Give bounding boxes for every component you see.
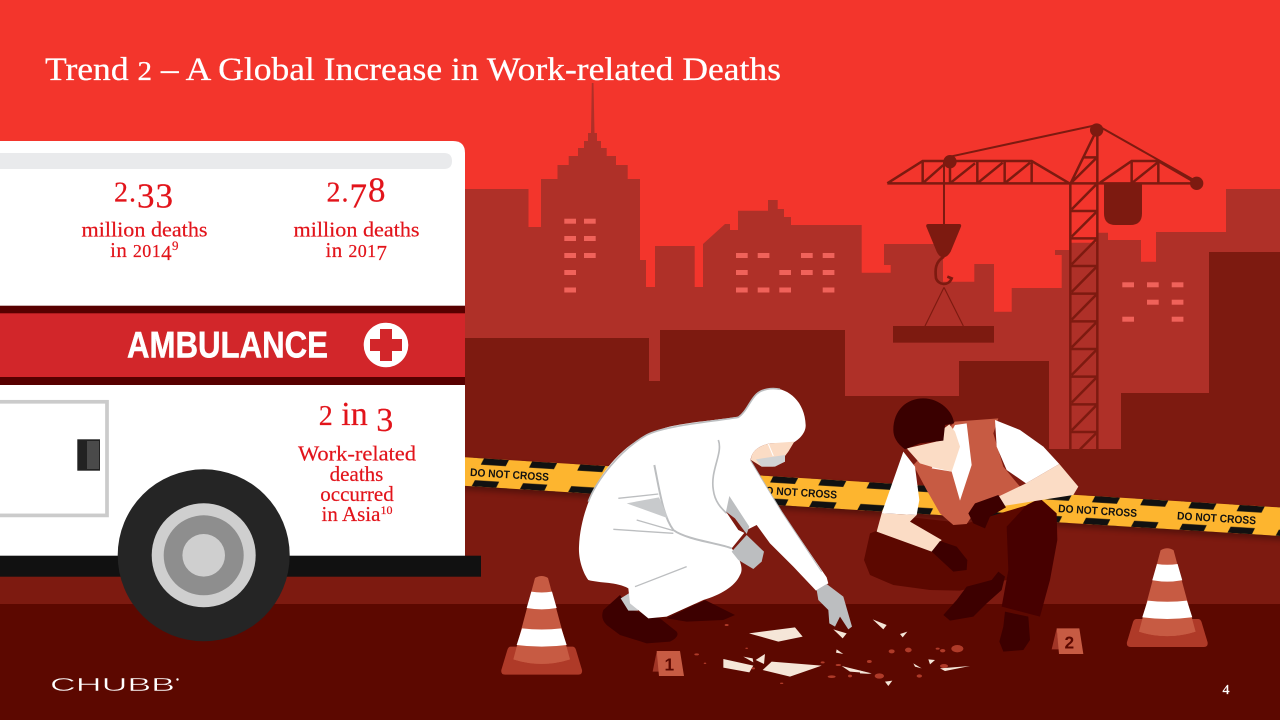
stat: 2 in 3 work-related deaths in Asia: 10 — [380, 503, 392, 517]
building windows — [564, 219, 1183, 322]
head and arms skin — [877, 424, 1078, 552]
evidence marker 1: 1 — [665, 655, 675, 675]
trousers — [864, 498, 1057, 617]
traffic cone left — [501, 576, 582, 675]
shirt — [882, 420, 1059, 515]
stat: 2.33 million deaths in 2014: 4 — [161, 241, 172, 265]
stat: 2.33 million deaths in 2014: million deaths — [82, 218, 208, 242]
stat: 2.78 million deaths in 2017: 7 — [350, 177, 368, 216]
gloves — [732, 535, 852, 629]
bumper — [0, 556, 481, 577]
shoes — [943, 572, 1030, 652]
vest — [913, 418, 1020, 525]
stat: 2.78 million deaths in 2017: 2. — [326, 178, 350, 209]
stat: 2.78 million deaths in 2017 — [294, 171, 420, 265]
evidence marker 2: 2 — [1065, 632, 1074, 652]
tape labels: DO NOT CROSS — [758, 485, 837, 501]
stat: 2 in 3 work-related deaths in Asia: Work-related — [298, 442, 417, 466]
forensic investigator in white suit — [579, 388, 852, 643]
page number: 4 — [1222, 683, 1230, 698]
stat: 2.78 million deaths in 2017: 7 — [377, 241, 387, 265]
crane hook — [936, 257, 952, 284]
stat: 2.33 million deaths in 2014: 33 — [137, 177, 174, 216]
mid ground strip under ambulance — [0, 570, 480, 604]
stat: 2.78 million deaths in 2017: million deaths — [294, 218, 420, 242]
tape labels: DO NOT CROSS — [470, 467, 549, 484]
stat: 2.33 million deaths in 2014: 2. — [114, 178, 137, 209]
ambulance stripe: AMBULANCE — [127, 325, 328, 366]
boots — [602, 595, 735, 643]
stat: 2 in 3 work-related deaths in Asia: 3 — [376, 402, 393, 439]
stat: 2 in 3 work-related deaths in Asia: occurred — [320, 482, 394, 506]
stat: 2 in 3 work-related deaths in Asia: deaths — [330, 462, 383, 486]
white suit — [579, 388, 828, 618]
hair — [893, 398, 954, 449]
face and mask — [751, 442, 794, 467]
wheel — [118, 469, 290, 641]
stat: 2.33 million deaths in 2014: 9 — [172, 238, 179, 253]
door — [0, 402, 107, 515]
work gloves — [932, 495, 1006, 572]
logo: Chubb: CHUBB — [50, 675, 175, 695]
stat: 2 in 3 work-related deaths in Asia: in Asia — [322, 502, 380, 526]
suit outline and folds — [588, 389, 822, 587]
roof rail — [0, 153, 452, 169]
evidence marker 1 — [653, 651, 684, 676]
tower crane — [887, 123, 1203, 450]
stat: 2.78 million deaths in 2017: 8 — [368, 171, 386, 210]
title: Trend 2 – A Global Increase in Work-related Deaths — [45, 52, 781, 88]
icon: medical cross — [364, 323, 408, 367]
traffic cone right — [1127, 548, 1208, 647]
investigator crouching man — [864, 398, 1078, 652]
logo: Chubb — [50, 675, 179, 695]
broken debris and blood drops — [694, 619, 970, 686]
tape labels: DO NOT CROSS — [1058, 503, 1137, 520]
ambulance body — [0, 141, 465, 556]
stat: 2.33 million deaths in 2014 — [82, 177, 208, 265]
stat: 2 in 3 work-related deaths in Asia — [298, 396, 417, 526]
tape labels — [470, 467, 1256, 527]
ambulance stripe — [0, 306, 465, 385]
evidence marker 2 — [1052, 628, 1083, 654]
ambulance — [0, 141, 481, 641]
far city skyline — [465, 83, 1280, 610]
near dark buildings and mid ground — [465, 252, 1280, 606]
stat: 2.78 million deaths in 2017: in 201 — [326, 238, 377, 262]
crime scene tape — [463, 457, 1280, 540]
foreground road — [0, 604, 1280, 720]
tape labels: DO NOT CROSS — [1177, 510, 1256, 527]
stat: 2.33 million deaths in 2014: in 201 — [110, 238, 161, 262]
stat: 2 in 3 work-related deaths in Asia: 2 in — [319, 396, 368, 433]
